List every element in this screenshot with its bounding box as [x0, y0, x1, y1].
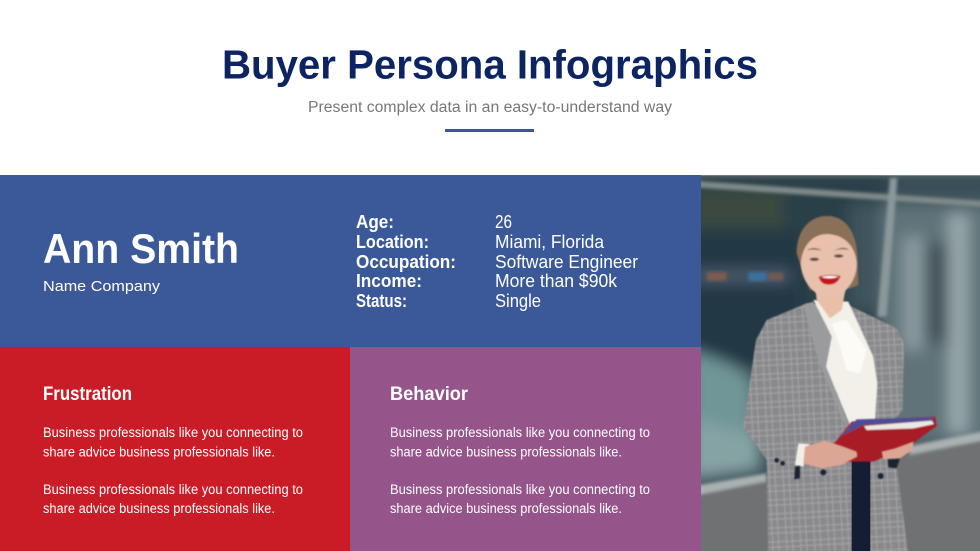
subtitle: Present complex data in an easy-to-understand way: [308, 99, 672, 116]
woman: blazer: [743, 303, 910, 551]
profile values: Single: [495, 291, 541, 311]
frustration body text: [43, 425, 303, 516]
blazer buttons: [774, 458, 900, 479]
photo: businesswoman holding a red folder: [701, 175, 980, 551]
woman: hair: [797, 216, 858, 290]
profile labels: Income:: [356, 271, 422, 291]
woman: lapels: [803, 302, 850, 430]
behavior body text: Business professionals like you connecting to: [390, 425, 650, 440]
city light reflections: [707, 272, 783, 281]
title accent bar: [445, 129, 534, 132]
woman: blouse: [813, 300, 877, 427]
profile labels: Status:: [356, 291, 407, 311]
persona name: Ann Smith: [43, 225, 239, 272]
frustration body text: share advice business professionals like.: [43, 501, 275, 516]
profile labels: Location:: [356, 232, 429, 252]
company: Name Company: [43, 278, 161, 295]
window frame bars: [693, 170, 980, 317]
frustration body text: share advice business professionals like.: [43, 444, 275, 460]
profile values: 26: [495, 212, 512, 232]
panel: behavior: [350, 347, 701, 551]
profile labels: Age:: [356, 212, 394, 232]
frustration body text: Business professionals like you connecting to: [43, 425, 303, 440]
frustration heading: Frustration: [43, 384, 132, 405]
profile values: Software Engineer: [495, 252, 638, 272]
title: Buyer Persona Infographics: [222, 42, 758, 88]
woman: face: [801, 234, 857, 298]
behavior body text: Business professionals like you connecting to: [390, 482, 650, 497]
woman: red folder: [832, 417, 937, 462]
panel: frustration: [0, 347, 350, 551]
profile values: [495, 212, 638, 311]
behavior body text: share advice business professionals like.: [390, 444, 622, 460]
woman: neck: [815, 289, 846, 319]
profile labels: [356, 212, 456, 311]
woman: shirt bow: [832, 320, 867, 373]
photo background: glass building: [701, 175, 980, 488]
profile labels: Occupation:: [356, 252, 456, 272]
behavior body text: share advice business professionals like.: [390, 501, 622, 516]
woman: cuff and left hand: [795, 441, 857, 468]
frustration body text: Business professionals like you connecting to: [43, 482, 303, 497]
profile values: More than $90k: [495, 271, 618, 291]
profile values: Miami, Florida: [495, 232, 605, 252]
panel: profile: [0, 175, 701, 347]
woman: right hand: [882, 442, 913, 459]
behavior body text: [390, 425, 650, 516]
woman: dark top: [852, 458, 870, 551]
photo background: pavement: [690, 429, 980, 551]
behavior heading: Behavior: [390, 384, 469, 405]
